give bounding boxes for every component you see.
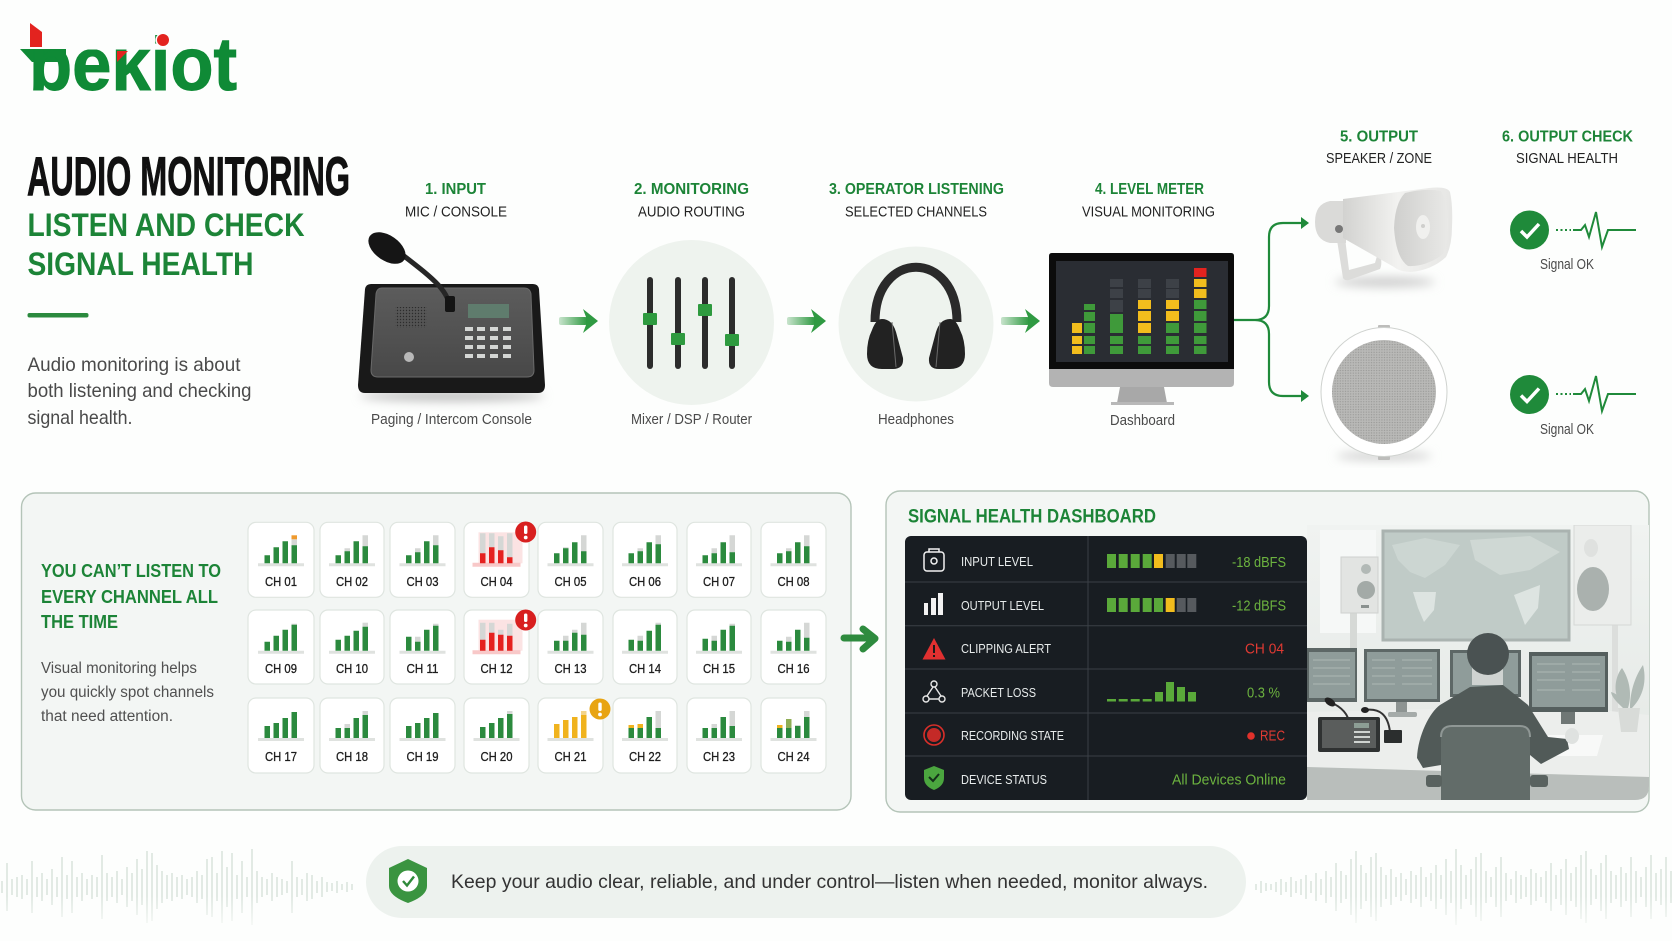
channel CH 02: [320, 522, 384, 597]
row: input level: [924, 549, 1286, 571]
channel CH 21 warning: [538, 698, 603, 773]
channel CH 06: CH 06: [629, 574, 661, 589]
channel CH 10: [320, 610, 384, 684]
panel: signal health dashboard: [886, 491, 1649, 812]
icon: signal ok bottom: [1510, 375, 1636, 438]
channel CH 14: CH 14: [629, 661, 661, 676]
step 1: input: 1. INPUT: [425, 181, 487, 198]
icon: shield: [389, 859, 427, 903]
left studio speaker: [1341, 557, 1378, 655]
channel CH 19: CH 19: [406, 749, 438, 764]
channel CH 14: [613, 610, 677, 684]
channel CH 11: [390, 610, 455, 684]
channel CH 24: CH 24: [778, 749, 810, 764]
channel CH 05: CH 05: [554, 574, 586, 589]
channel CH 18: [320, 698, 384, 773]
step 6: output check: [1502, 128, 1636, 438]
plant: [1611, 665, 1645, 732]
step 3: operator listening: 3. OPERATOR LISTENING: [829, 181, 1004, 198]
desk: [1612, 712, 1618, 717]
channel CH 04 alert: [464, 522, 529, 597]
step 6: output check: 6. OUTPUT CHECK: [1502, 128, 1634, 146]
row: packet loss: [923, 681, 1280, 702]
panel heading: [41, 561, 221, 632]
channel CH 05: [538, 522, 603, 597]
control room monitors: [1307, 648, 1608, 724]
channel CH 15: [687, 610, 751, 684]
step 1: input: [358, 181, 545, 428]
icon: signal ok bottom: Signal OK: [1540, 422, 1594, 438]
icon: paging console: [358, 226, 545, 401]
step 2: monitoring: [609, 181, 774, 428]
row: output level: [924, 593, 1286, 615]
caption: Dashboard: [1110, 413, 1175, 429]
arrow: branch to outputs: [1234, 217, 1309, 402]
row: packet loss: 0.3 %: [1247, 686, 1280, 702]
panel text: you quickly spot channels: [41, 684, 214, 701]
channel CH 08: CH 08: [778, 574, 810, 589]
channel CH 16: CH 16: [778, 661, 810, 676]
step 4: level meter: [1049, 181, 1234, 429]
channel CH 20: [464, 698, 529, 773]
row: recording state: RECORDING STATE: [961, 728, 1064, 743]
small console: [1318, 696, 1402, 752]
channel CH 09: CH 09: [265, 661, 297, 676]
panel heading: THE TIME: [41, 612, 118, 632]
channel CH 12 alert: [464, 610, 529, 684]
dark status table: [905, 536, 1307, 800]
icon: horn speaker: [1315, 188, 1452, 287]
panel text: Visual monitoring helps: [41, 660, 197, 677]
right studio speaker: [1574, 525, 1631, 717]
channel CH 15: CH 15: [703, 661, 735, 676]
row: clipping alert: [922, 638, 1284, 660]
illustration: control room: [1307, 525, 1649, 800]
icon: shield check: [924, 766, 944, 790]
step 5: output: SPEAKER / ZONE: [1326, 150, 1432, 167]
channel CH 20: CH 20: [480, 749, 512, 764]
wall map: [1383, 531, 1569, 640]
row: device status: [924, 766, 1286, 790]
channel CH 08: [761, 522, 826, 597]
channel CH 04 alert: CH 04: [480, 574, 512, 589]
panel: channel grid: [22, 493, 851, 810]
caption: Headphones: [878, 412, 954, 428]
channel CH 13: CH 13: [554, 661, 586, 676]
row: clipping alert: CLIPPING ALERT: [961, 641, 1051, 656]
channel CH 10: CH 10: [336, 661, 368, 676]
channel CH 01: CH 01: [265, 574, 297, 589]
intro text: [28, 354, 252, 429]
channel CH 06: [613, 522, 677, 597]
channel CH 23: [687, 698, 751, 773]
step 5: output: 5. OUTPUT: [1340, 128, 1419, 146]
step 2: monitoring: AUDIO ROUTING: [638, 204, 745, 220]
arrow: [1001, 309, 1040, 333]
row: input level: INPUT LEVEL: [961, 554, 1033, 569]
channel CH 13: [538, 610, 603, 684]
caption: Mixer / DSP / Router: [631, 412, 752, 428]
step 4: level meter: VISUAL MONITORING: [1082, 204, 1215, 220]
channel CH 02: CH 02: [336, 574, 368, 589]
logo: bekiot: bekiot: [29, 22, 237, 106]
channel CH 07: CH 07: [703, 574, 735, 589]
row: output level: OUTPUT LEVEL: [961, 598, 1044, 613]
icon: record: [924, 725, 944, 745]
channel CH 03: CH 03: [406, 574, 438, 589]
subtitle: LISTEN AND CHECK: [28, 207, 304, 243]
channel CH 24: [761, 698, 826, 773]
arrow: [787, 309, 826, 333]
intro text: signal health.: [28, 407, 132, 429]
operator figure: [1417, 633, 1579, 800]
channel CH 17: CH 17: [265, 749, 297, 764]
badge: alert CH 12: [515, 610, 536, 630]
channel CH 21 warning: CH 21: [554, 749, 586, 764]
panel heading: SIGNAL HEALTH DASHBOARD: [908, 507, 1156, 528]
row: output level: -12 dBFS: [1232, 598, 1286, 614]
level bars: [1072, 268, 1206, 354]
row: input level: -18 dBFS: [1232, 555, 1286, 571]
panel heading: YOU CAN’T LISTEN TO: [41, 561, 221, 581]
channel CH 19: [390, 698, 455, 773]
channel CH 11: CH 11: [406, 661, 438, 676]
arrow: [559, 309, 598, 333]
channel CH 18: CH 18: [336, 749, 368, 764]
row: device status: DEVICE STATUS: [961, 772, 1047, 787]
step 4: level meter: 4. LEVEL METER: [1095, 181, 1204, 198]
channel CH 09: [248, 610, 314, 684]
channel CH 22: [613, 698, 677, 773]
footer banner: [366, 846, 1246, 918]
row: clipping alert: CH 04: [1245, 642, 1284, 658]
arrow to dashboard: [844, 629, 875, 649]
background waveform left: [2, 849, 352, 925]
row: device status: All Devices Online: [1172, 772, 1286, 788]
icon: input: [924, 549, 944, 571]
intro text: both listening and checking: [28, 380, 252, 402]
icon: ceiling speaker: [1321, 325, 1447, 460]
subtitle: SIGNAL HEALTH: [28, 246, 254, 282]
panel text: [41, 660, 214, 725]
icon: network nodes: [923, 681, 945, 702]
step 2: monitoring: 2. MONITORING: [634, 181, 749, 198]
step 3: operator listening: SELECTED CHANNELS: [845, 204, 987, 220]
channel CH 17: [248, 698, 314, 773]
badge: alert CH 04: [515, 522, 536, 542]
channel CH 23: CH 23: [703, 749, 735, 764]
footer text: Keep your audio clear, reliable, and under control—listen when needed, monitor always.: [451, 871, 1208, 893]
channel CH 07: [687, 522, 751, 597]
icon: mixer faders: [609, 240, 774, 405]
row: recording state: REC: [1260, 728, 1285, 744]
channel CH 03: [390, 522, 455, 597]
step 3: operator listening: [829, 181, 1004, 428]
keyboard: [1548, 735, 1603, 756]
step 1: input: MIC / CONSOLE: [405, 204, 507, 220]
badge: warning CH 21: [590, 698, 610, 720]
icon: signal ok top: [1510, 210, 1636, 273]
channel CH 12 alert: CH 12: [480, 661, 512, 676]
icon: dashboard monitor: [1049, 253, 1234, 405]
title: AUDIO MONITORING: [27, 145, 350, 207]
step 5: output: [1315, 128, 1452, 460]
intro text: Audio monitoring is about: [28, 354, 241, 376]
caption: Paging / Intercom Console: [371, 412, 532, 428]
icon: output bars: [924, 593, 943, 615]
channel CH 22: CH 22: [629, 749, 661, 764]
channel CH 01: [248, 522, 314, 597]
row: packet loss: PACKET LOSS: [961, 685, 1036, 700]
icon: signal ok top: Signal OK: [1540, 257, 1594, 273]
panel text: that need attention.: [41, 708, 173, 725]
row: recording state: [924, 725, 1285, 745]
step 6: output check: SIGNAL HEALTH: [1516, 150, 1618, 167]
background waveform right: [1256, 849, 1671, 925]
icon: headphones: [838, 246, 994, 402]
panel heading: EVERY CHANNEL ALL: [41, 587, 218, 607]
subtitle: [28, 207, 304, 282]
channel CH 16: [761, 610, 826, 684]
icon: warning triangle: [922, 638, 946, 660]
